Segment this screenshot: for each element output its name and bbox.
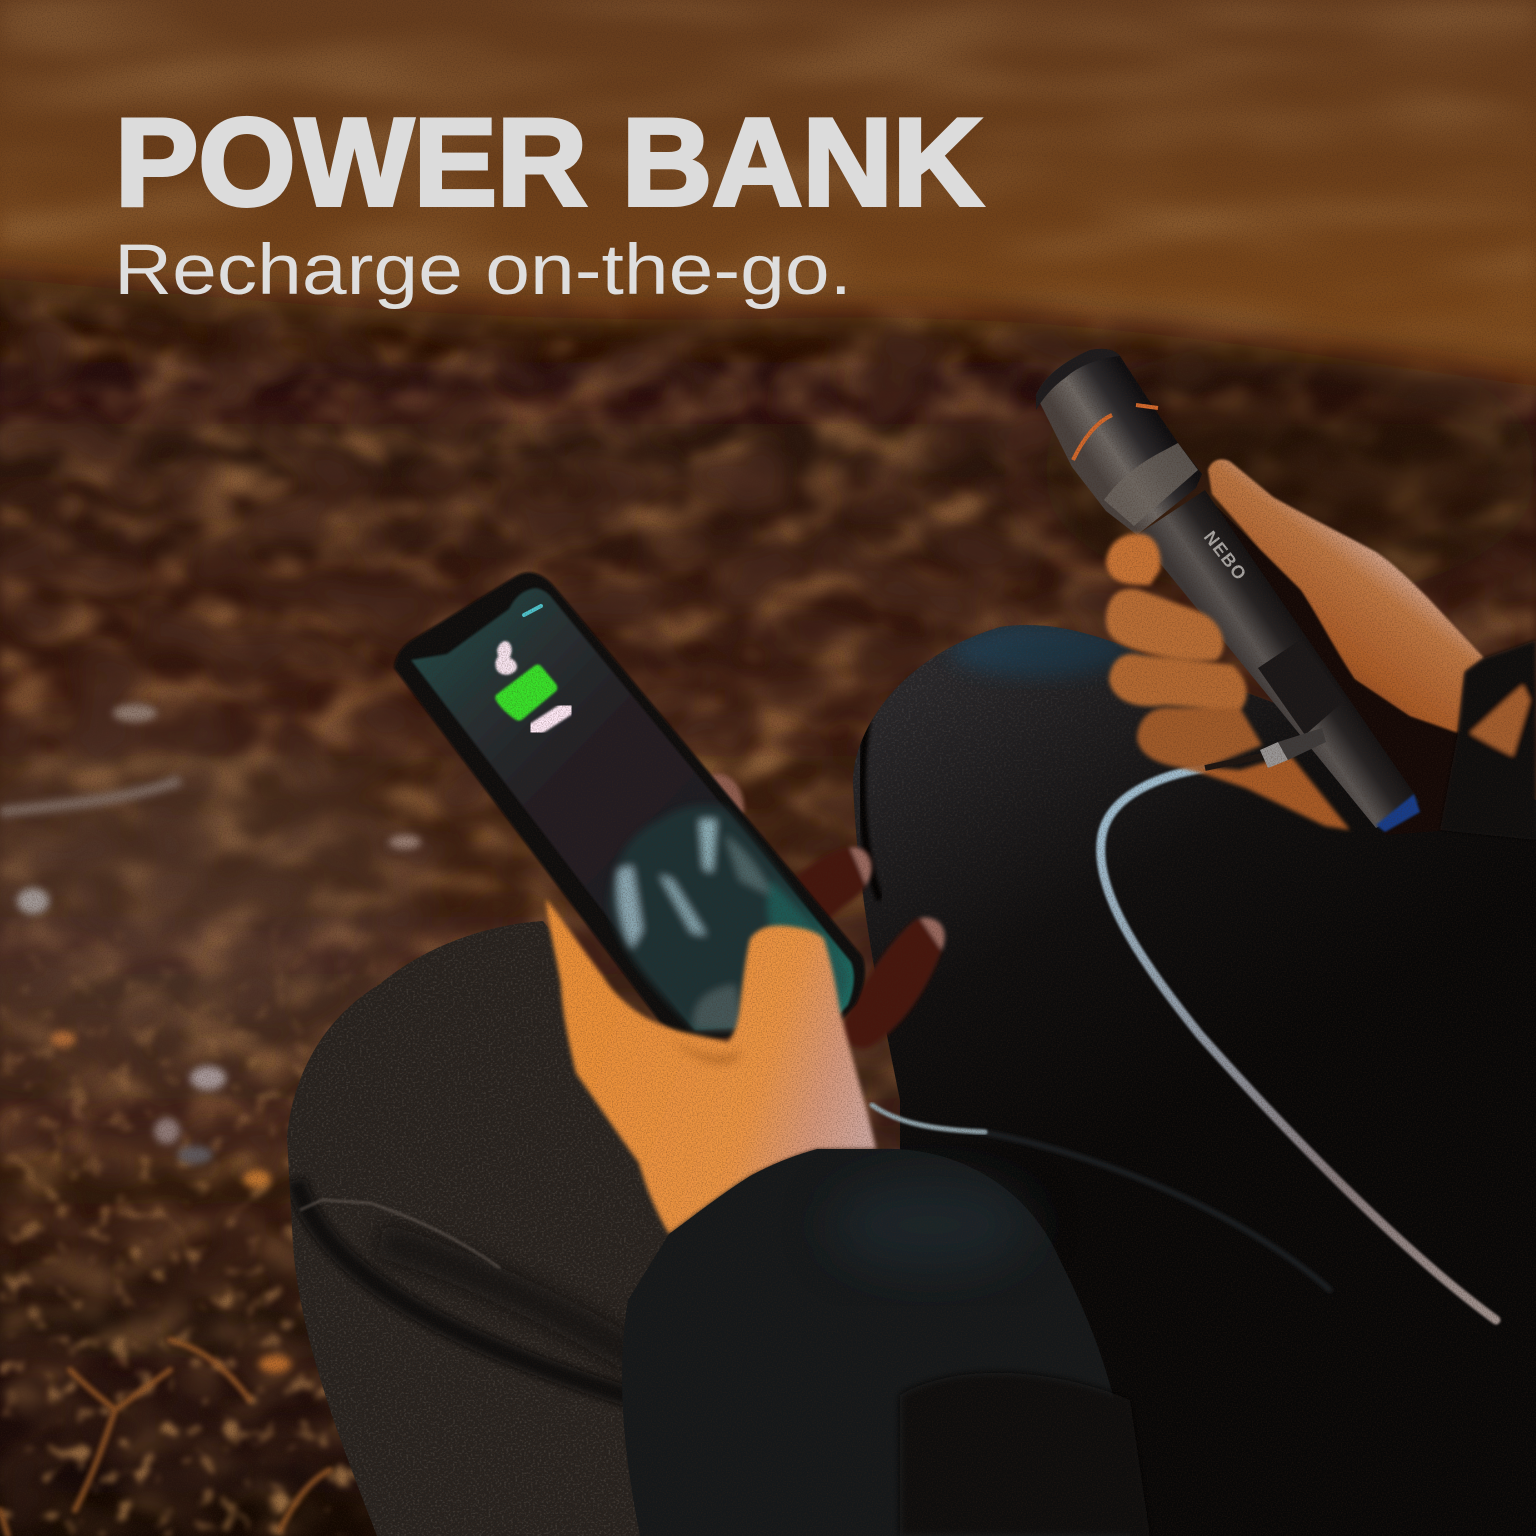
blue accent at flashlight base [1376,794,1420,832]
phone body [394,572,865,1042]
phone screen [411,588,854,1030]
ring fingertip highlight [920,918,945,950]
left leg in dark jeans [285,920,785,1536]
title: POWER BANK [115,94,983,232]
palm shadow under thumb [670,1040,742,1064]
dark grip band [1258,640,1345,735]
pale stones and leaves [0,704,421,1373]
index fingertip [705,774,744,826]
ring finger [840,917,944,1048]
wrist and jacket cuff [1440,640,1536,840]
flashlight body [1137,490,1420,828]
index finger [1106,534,1160,585]
flashlight head [1036,349,1202,535]
battery label glow [534,708,568,730]
middle finger [1106,589,1223,660]
back hand fingers behind phone [705,774,945,1048]
orange accent ring [1073,405,1158,460]
jacket sleeve [622,1149,1150,1536]
blurred far ground background [0,0,1536,440]
ring finger [1109,654,1247,710]
nebo logo: NEBO [1200,527,1250,584]
fingers wrapping flashlight [1106,534,1262,768]
status indicator [524,606,541,615]
lock icon glow [495,641,517,675]
shadow behind flashlight hand [1205,495,1465,835]
subtitle: Recharge on-the-go. [114,231,852,310]
metal collar [1104,443,1198,526]
usb plug and cord [1205,728,1326,768]
white charging cable [872,768,1496,1320]
lens cap edge [1036,349,1120,410]
middle finger [795,847,872,922]
front hand holding phone [546,899,876,1234]
wallpaper rock [609,805,848,1030]
smartphone [394,572,865,1042]
lower palm under flashlight [1174,755,1350,830]
middle fingertip highlight [850,848,871,885]
hand back and thumb behind flashlight [1208,459,1484,733]
right leg in dark jeans [850,610,1536,1536]
flashlight power bank [1036,349,1420,828]
dry twigs [0,1340,330,1536]
green battery indicator [495,664,557,721]
little finger [1137,708,1262,768]
